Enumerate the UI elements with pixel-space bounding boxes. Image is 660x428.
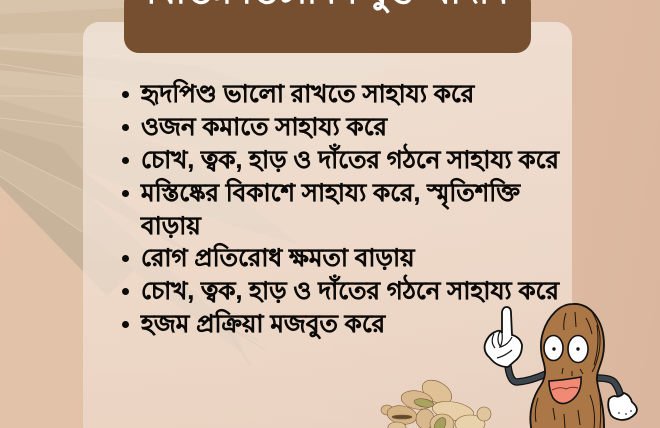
benefits list: বাড়ায় bbox=[141, 213, 201, 240]
peanut mouth bbox=[549, 377, 581, 404]
benefits list: ওজন কমাতে সাহায্য করে bbox=[141, 114, 387, 141]
peanut texture bbox=[535, 312, 601, 428]
peanut eyes bbox=[544, 336, 588, 362]
benefits list: চোখ, ত্বক, হাড় ও দাঁতের গঠনে সাহায্য করে bbox=[141, 278, 559, 305]
benefits list: মস্তিষ্কের বিকাশে সাহায্য করে, স্মৃতিশক্তি bbox=[141, 180, 520, 207]
content panel bbox=[83, 22, 572, 428]
pointing hand bbox=[485, 307, 522, 367]
benefits list: হৃদপিণ্ড ভালো রাখতে সাহায্য করে bbox=[141, 81, 474, 108]
peanut body bbox=[530, 304, 604, 428]
benefits list: হজম প্রক্রিয়া মজবুত করে bbox=[141, 311, 385, 338]
benefits list: রোগ প্রতিরোধ ক্ষমতা বাড়ায় bbox=[141, 245, 415, 272]
benefits list: চোখ, ত্বক, হাড় ও দাঁতের গঠনে সাহায্য করে bbox=[141, 147, 559, 174]
peanut arms bbox=[508, 366, 621, 398]
title banner bbox=[124, 0, 531, 53]
open hand bbox=[608, 393, 637, 420]
